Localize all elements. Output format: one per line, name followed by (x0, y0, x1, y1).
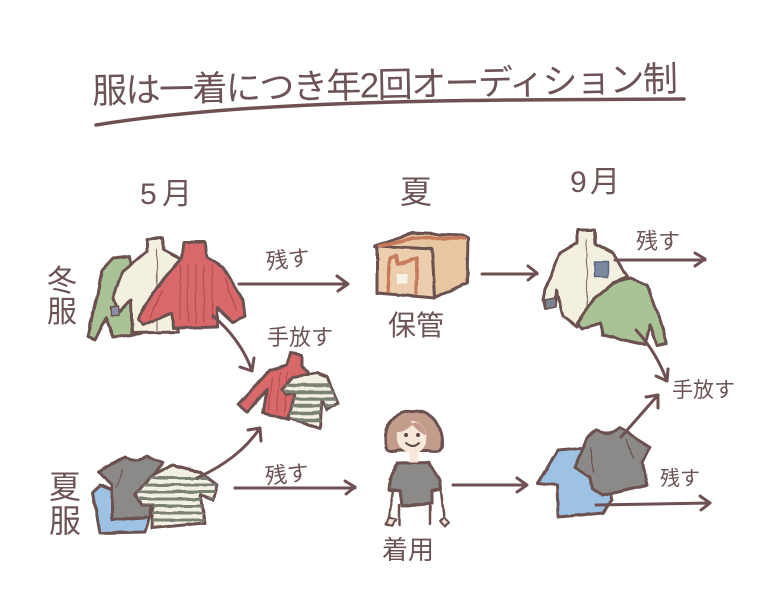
label: keep 1: 残す (265, 245, 311, 274)
cream jacket (113, 238, 181, 333)
arrow: winter discard (213, 316, 254, 371)
label: wearing: 着用 (382, 535, 434, 565)
label: discard 2: 手放す (672, 379, 735, 402)
arrow: summer keep (235, 481, 355, 494)
arrow: winter keep (239, 276, 348, 291)
arrow: person to shirts (453, 478, 527, 492)
title: 服は一着につき年2回オーディション制 (92, 60, 678, 111)
heading: summer: 夏 (400, 174, 432, 210)
icon: gray T-shirt right (575, 428, 650, 495)
arrow: box to jacket (482, 266, 537, 280)
label: discard 1: 手放す (267, 325, 333, 350)
red turtleneck (138, 242, 245, 328)
icon: blue T-shirt right (538, 448, 612, 517)
icon: green sweater (577, 278, 667, 345)
icon: small discard pile (238, 353, 340, 428)
arrow: green discard (636, 330, 668, 381)
arrow: blue keep (596, 496, 710, 510)
icon: cream jacket (543, 230, 627, 327)
icon: person (385, 411, 449, 526)
label: winter clothes: 服 (47, 296, 77, 329)
heading: May: 5月 (140, 178, 192, 211)
label: summer clothes: 服 (49, 503, 81, 539)
icon: winter clothes group (88, 238, 245, 340)
gray T-shirt (98, 456, 163, 520)
icon: summer clothes group (93, 456, 220, 533)
green sweater (88, 256, 142, 340)
label: summer clothes: 夏 (49, 469, 81, 505)
arrow: jacket keep (615, 253, 705, 266)
person face (405, 434, 419, 446)
arrow: gray discard (621, 395, 658, 437)
label: keep 3: 残す (660, 467, 700, 490)
label: storage: 保管 (388, 310, 444, 341)
label: keep 2: 残す (636, 229, 680, 254)
heading: September: 9月 (570, 166, 620, 199)
blue T-shirt (93, 485, 150, 533)
label: keep 4: 残す (264, 460, 310, 489)
label: winter clothes: 冬 (47, 265, 77, 298)
arrow: summer discard (197, 428, 261, 478)
icon: storage box (375, 233, 468, 298)
striped shirt (135, 465, 217, 528)
